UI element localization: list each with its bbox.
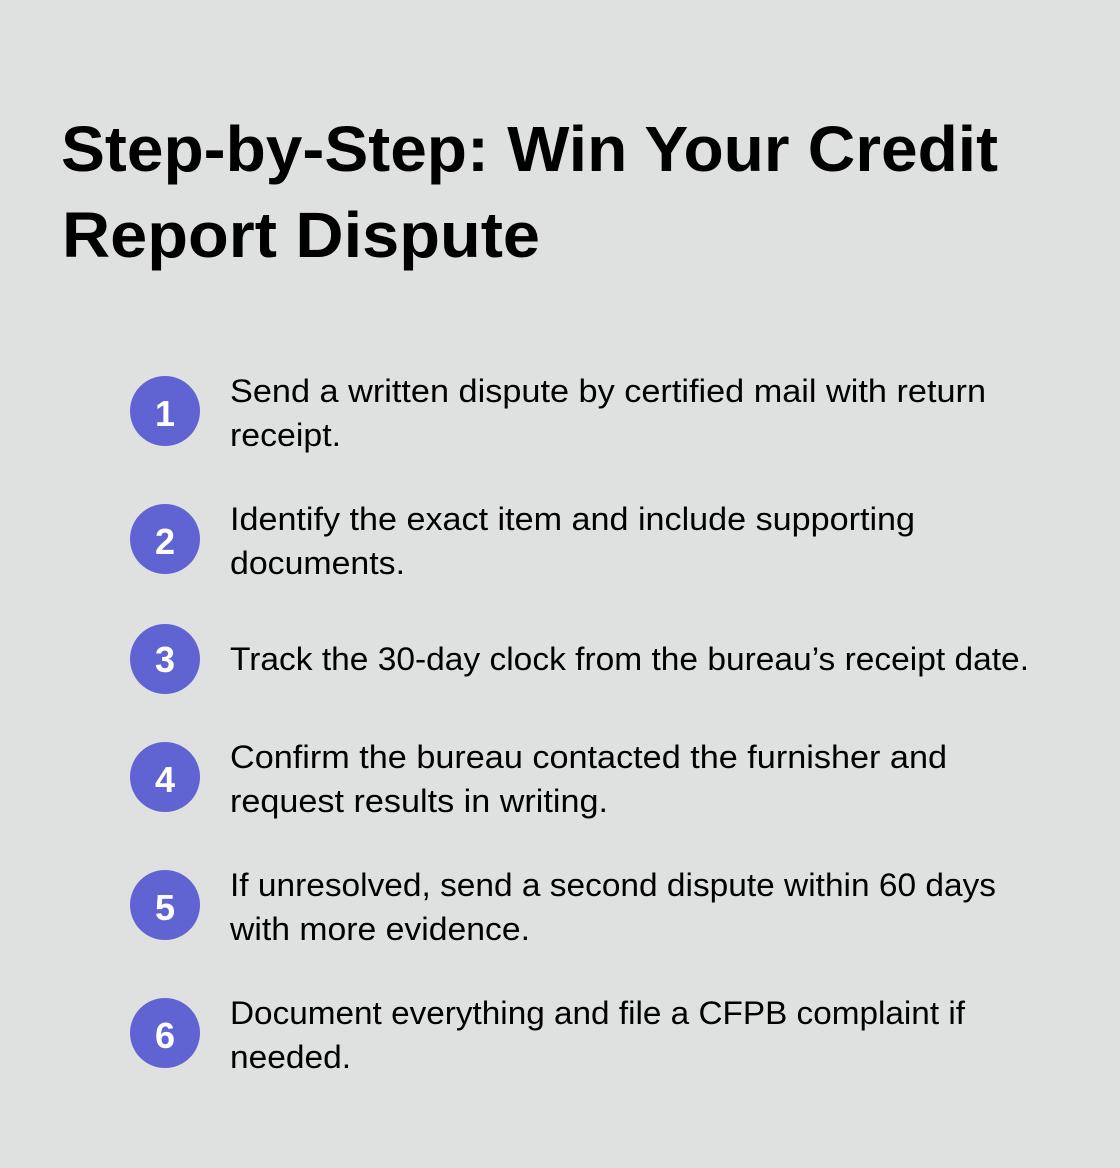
- step 5 text: [229, 867, 996, 947]
- icon: number badge 6: 6: [155, 1015, 175, 1056]
- step 4 text: request results in writing.: [230, 783, 608, 819]
- step 6 text: needed.: [230, 1039, 351, 1075]
- step 1 text: receipt.: [230, 417, 341, 453]
- step 3: [130, 624, 1029, 694]
- step 1: [130, 373, 986, 453]
- icon: number badge 4: [130, 742, 200, 812]
- step 5 text: If unresolved, send a second dispute within 60 days: [230, 867, 996, 903]
- steps list: [130, 373, 1029, 1075]
- step 4 text: [230, 739, 947, 819]
- step 5 text: with more evidence.: [229, 911, 530, 947]
- icon: number badge 5: 5: [155, 887, 175, 928]
- step 6 text: [230, 995, 965, 1075]
- icon: number badge 4: 4: [155, 759, 175, 800]
- icon: number badge 3: 3: [155, 639, 175, 680]
- step 5: [130, 867, 996, 947]
- icon: number badge 2: [130, 504, 200, 574]
- icon: number badge 1: 1: [155, 393, 175, 434]
- title: Step-by-Step: Win Your Credit: [61, 113, 998, 185]
- step 6: [130, 995, 965, 1075]
- step 2 text: Identify the exact item and include supporting: [230, 501, 915, 537]
- step 1 text: [230, 373, 986, 453]
- icon: number badge 3: [130, 624, 200, 694]
- icon: number badge 6: [130, 998, 200, 1068]
- step 2: [130, 501, 915, 581]
- step 1 text: Send a written dispute by certified mail with return: [230, 373, 986, 409]
- title: Report Dispute: [62, 199, 540, 271]
- icon: number badge 1: [130, 376, 200, 446]
- step 4: [130, 739, 947, 819]
- step 3 text: Track the 30-day clock from the bureau’s receipt date.: [230, 641, 1029, 677]
- step 2 text: documents.: [230, 545, 405, 581]
- step 4 text: Confirm the bureau contacted the furnisher and: [230, 739, 947, 775]
- step 2 text: [230, 501, 915, 581]
- icon: number badge 2: 2: [155, 521, 175, 562]
- step 6 text: Document everything and file a CFPB complaint if: [230, 995, 965, 1031]
- icon: number badge 5: [130, 870, 200, 940]
- title: [61, 113, 998, 271]
